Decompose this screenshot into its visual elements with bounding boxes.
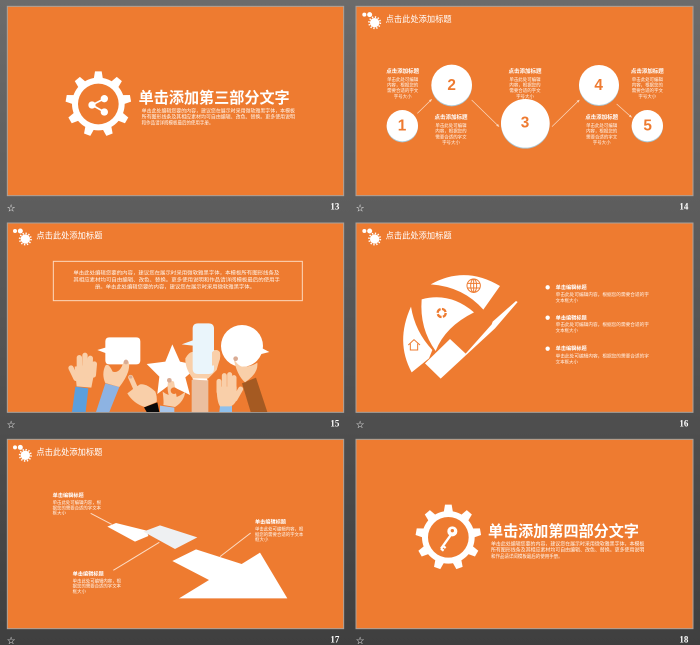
list item 3: 文本框大小: [556, 359, 578, 366]
section description: 单击此处编辑您要的内容，建议您在展示时采用微软雅黑字体，本模板: [491, 541, 644, 548]
slide title: 点击此处添加标题: [386, 230, 452, 240]
text block top middle: 内容，根据您的: [509, 81, 541, 88]
open hand with blue sleeve: [71, 355, 96, 412]
footer star icon: ☆: [356, 420, 365, 431]
text box: 其相应素材均可自由编辑、改色、替换。更多使用说明和作品请详阅模板最后的使用手: [73, 276, 280, 283]
text block top left: 单击此处可编辑: [387, 76, 419, 83]
step circle 1: 1: [398, 118, 407, 135]
slide 17 panel: [7, 439, 344, 629]
arrow 3 to 4: [552, 100, 579, 127]
step circle 5: 5: [643, 118, 652, 135]
slide 17: arrow graphic: [7, 439, 344, 645]
label lower left: 据您的需要合适的字文本: [73, 583, 122, 590]
list item 1: 单击编辑标题: [556, 283, 587, 291]
text block top left: 需要合适的字文: [387, 87, 419, 94]
label lower left: 单击此处可编辑内容，根: [73, 577, 122, 584]
text block top middle: 单击此处可编辑: [509, 76, 541, 83]
section description: [491, 541, 644, 560]
section description: 和作品请详阅模板最后的使用手册。: [142, 119, 213, 126]
list item 2: [545, 313, 650, 334]
check mark: [425, 301, 518, 379]
text block top middle: 字号大小: [516, 93, 534, 100]
list item 1: 文本框大小: [556, 297, 578, 304]
label right: [255, 517, 304, 543]
section heading: 单击添加第四部分文字: [488, 522, 639, 540]
text block lower left: 需要合适的字文: [435, 133, 467, 140]
step circle 3: 3: [521, 115, 529, 132]
text block lower right: 字号大小: [593, 139, 611, 146]
label upper left: 据您的需要合适的字文本: [53, 504, 102, 511]
slide 15: hands illustration: [7, 223, 344, 431]
step circle 3: [501, 99, 550, 149]
text box: 册。单击此处编辑您要的内容，建议您在展示时采用微软雅黑字体。: [95, 283, 255, 290]
slide title: 点击此处添加标题: [36, 230, 103, 240]
title icon: [362, 228, 380, 245]
slide 16: tick chart with list: [356, 223, 693, 431]
text block top right: 点击添加标题: [631, 67, 664, 75]
section description: [142, 107, 295, 126]
gear icon with share symbol: [65, 71, 131, 136]
section description: 单击此处编辑您要的内容，建议您在展示时采用微软雅黑字体，本模板: [142, 107, 295, 114]
arrow 1 to 2: [417, 99, 432, 113]
pointing hand with black cuff: [127, 375, 159, 412]
arrow 4 to 5: [617, 104, 632, 117]
label right: 框大小: [255, 536, 269, 543]
slide 18 panel: [356, 439, 693, 629]
arrow segment one: [107, 523, 148, 542]
arrow head: [172, 549, 287, 598]
leader line to third label: [220, 533, 251, 557]
hand holding rectangular speech bubble: [96, 337, 140, 412]
title icon: [13, 445, 31, 461]
text block lower right: 点击添加标题: [585, 113, 619, 121]
text block lower right: 单击此处可编辑: [586, 122, 618, 129]
fan segment left with house icon: [403, 307, 432, 372]
white star with hand: [147, 344, 199, 412]
arrow segment two: [143, 525, 197, 549]
page number 16: 16: [679, 418, 689, 428]
leader line to second label: [113, 542, 159, 570]
step circle 4: 4: [594, 77, 603, 94]
list item 1: 单击此处可编辑内容，根据您的需要合适的字: [556, 291, 650, 298]
text block lower left: 点击添加标题: [435, 113, 468, 121]
text block top left: 内容，根据您的: [387, 81, 419, 88]
slide 16 panel: [356, 223, 693, 412]
slide 13 panel: [7, 6, 344, 196]
hand holding tall speech bubble: [182, 323, 220, 412]
step circle 5: [632, 110, 663, 142]
page number 13: 13: [330, 202, 340, 212]
step circle 2: [431, 65, 472, 106]
list item 2: 文本框大小: [556, 327, 578, 334]
label upper left: 框大小: [53, 510, 67, 517]
section description: 所有图形线条及其相应素材均可自由编辑、改色、替换。更多使用说明: [142, 113, 295, 120]
illustration: hands holding speech bubbles and star: [71, 323, 269, 412]
label right: 单击编辑标题: [255, 517, 287, 525]
label lower left: 单击编辑标题: [73, 569, 104, 577]
text block top middle: 需要合适的字文: [509, 87, 541, 94]
text block top right: 字号大小: [638, 93, 657, 100]
fan and check mark graphic: [403, 275, 518, 379]
slide title: 点击此处添加标题: [386, 14, 452, 24]
page number 15: 15: [330, 418, 340, 428]
text block lower left: [435, 113, 468, 146]
gear icon with key symbol: [415, 505, 481, 570]
title icon: [13, 228, 31, 245]
text block top right: 需要合适的字文: [632, 87, 663, 94]
fan segment middle with recycle icon: [421, 297, 474, 351]
step circle 4: [579, 65, 619, 106]
text block lower right: 需要合适的字文: [586, 133, 618, 140]
label upper left: 单击编辑标题: [53, 491, 84, 499]
text block top left: [386, 67, 420, 100]
text block top left: 点击添加标题: [386, 67, 420, 75]
footer star icon: ☆: [356, 203, 365, 214]
leader line to first label: [91, 513, 112, 524]
fan segment top with globe icon: [431, 275, 500, 310]
label upper left: [53, 491, 102, 517]
step circle 1: [387, 110, 418, 142]
list item 1: [545, 283, 650, 304]
text block top middle: [509, 67, 542, 100]
slide 13: section title: [7, 6, 344, 214]
page number 18: 18: [679, 634, 689, 644]
page number 17: 17: [330, 634, 340, 644]
text block top right: [631, 67, 664, 100]
text box: [53, 261, 302, 301]
title icon: [362, 12, 380, 28]
list item 2: 单击编辑标题: [556, 313, 587, 321]
list item 3: [545, 344, 650, 366]
text block top left: 字号大小: [394, 93, 412, 100]
list item 3: 单击编辑标题: [556, 344, 587, 352]
arrow 2 to 3: [472, 100, 499, 127]
footer star icon: ☆: [7, 203, 16, 214]
label lower left: 框大小: [73, 588, 87, 595]
text block lower right: 内容，根据您的: [586, 128, 618, 135]
page number 14: 14: [679, 202, 689, 212]
list item 2: 单击此处可编辑内容，根据您的需要合适的字: [556, 321, 650, 328]
label lower left: [73, 569, 122, 595]
slide 14: five-step flow: [356, 6, 693, 214]
step circle 2: 2: [447, 77, 456, 94]
slide 14 panel: [356, 6, 693, 196]
slide 18: section title: [356, 439, 693, 645]
footer star icon: ☆: [7, 420, 16, 431]
label right: 据您的需要合适的字文本: [255, 531, 304, 538]
text block lower left: 内容，根据您的: [435, 128, 467, 135]
text box: 单击此处编辑您要的内容，建议您在展示时采用微软雅黑字体，本模板所有图形线条及: [73, 269, 279, 276]
slide 15 panel: [7, 223, 344, 412]
text block top right: 单击此处可编辑: [632, 76, 663, 83]
text block lower left: 字号大小: [442, 139, 460, 146]
slide title: 点击此处添加标题: [36, 447, 103, 457]
list item 3: 单击此处可编辑内容，根据您的需要合适的字: [556, 353, 650, 360]
text block top middle: 点击添加标题: [509, 67, 542, 75]
label right: 单击此处可编辑内容，根: [255, 526, 304, 533]
open hand with light blue sleeve: [217, 375, 241, 412]
section heading: 单击添加第三部分文字: [139, 89, 290, 107]
label upper left: 单击此处可编辑内容，根: [53, 499, 102, 506]
section description: 和作品请详阅模板最后的使用手册。: [491, 553, 563, 560]
hand holding round speech bubble with brown sleeve: [221, 325, 269, 412]
section description: 所有图形线条及其相应素材均可自由编辑、改色、替换。更多使用说明: [491, 547, 644, 554]
text block lower right: [585, 113, 619, 146]
text block top right: 内容，根据您的: [632, 81, 663, 88]
text block lower left: 单击此处可编辑: [435, 122, 467, 129]
